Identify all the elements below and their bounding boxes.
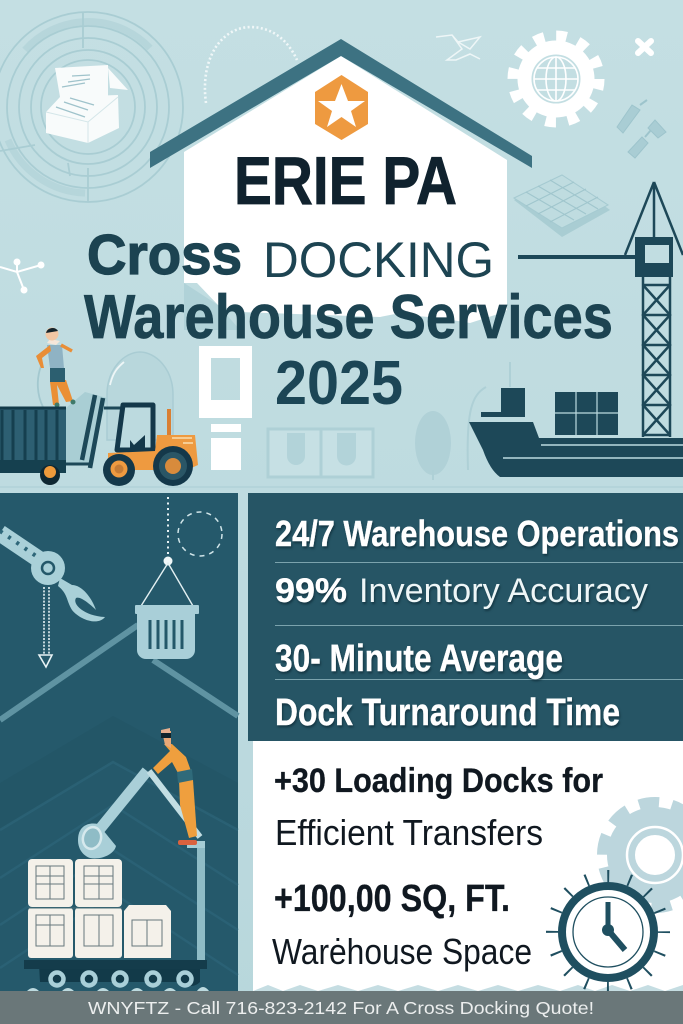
- panel: dark stats: [248, 493, 683, 741]
- heading: Warehouse Services: Warehouse Services: [84, 283, 613, 352]
- icon: stacked boxes: [28, 859, 171, 958]
- divider lines: [275, 562, 683, 680]
- stat: 30-minute average: 30- Minute Average: [275, 638, 563, 680]
- panel: left illustration: [0, 493, 238, 991]
- icon: dotted down arrow: [39, 587, 52, 667]
- icon: dashed circle: [178, 512, 222, 556]
- footer text: WNYFTZ - Call 716-823-2142 For A Cross Docking Quote!: [88, 998, 594, 1018]
- heading: Cross: Cross: [87, 223, 242, 287]
- icon: tower crane: [518, 182, 683, 437]
- fact: square feet: +100,00 SQ, FT.: [274, 878, 510, 920]
- faint dome behind forklift: [38, 352, 173, 463]
- icon: worker on container: [36, 328, 76, 408]
- icon: orange hexagon star badge: [315, 75, 368, 140]
- fact: efficient transfers: Efficient Transfers: [275, 812, 543, 853]
- scalloped bottom edge: [253, 985, 683, 991]
- icon: robot arm: [78, 771, 205, 961]
- icon: hanging basket: [135, 497, 199, 659]
- icon: small white molecule: [0, 260, 44, 292]
- fact: loading docks: +30 Loading Docks for: [274, 762, 603, 800]
- heading: 2025: 2025: [275, 349, 403, 418]
- stat: dock turnaround time: Dock Turnaround Time: [275, 692, 620, 734]
- white door shape: [199, 346, 252, 470]
- beams: [0, 625, 238, 720]
- panel: white facts: [253, 741, 683, 991]
- heading: ERIE PA: ERIE PA: [234, 143, 457, 219]
- icon: worker: [153, 728, 197, 845]
- fact: warehouse space: Warėhouse Space: [272, 931, 532, 972]
- stat: inventory accuracy: Inventory Accuracy: [359, 572, 648, 610]
- icon: wheeled cart: [24, 960, 207, 986]
- icon: small white x: [638, 41, 651, 53]
- icon: pale gear: [603, 803, 683, 907]
- icon: white gear with globe: [513, 36, 599, 122]
- icon: concentric rings with documents: [0, 12, 183, 202]
- stat: 99%: 99%: [275, 572, 347, 610]
- faint background scene: [0, 362, 683, 487]
- scalloped notches: [27, 987, 209, 991]
- icon: orange forklift: [66, 395, 198, 486]
- shade under house stair: [184, 283, 240, 330]
- icon: robotic claw: [0, 531, 105, 621]
- heading: DOCKING: DOCKING: [263, 232, 494, 288]
- chevron pattern: [0, 716, 238, 975]
- icon: cargo ship with containers: [469, 388, 683, 477]
- footer bar: [0, 991, 683, 1024]
- icon: birds: [436, 35, 480, 60]
- house with roof: [150, 39, 532, 323]
- icon: satellites: [617, 100, 666, 158]
- icon: dotted arc: [205, 27, 297, 103]
- icon: clock: [552, 876, 664, 988]
- icon: solar grid panel: [514, 175, 610, 237]
- icon: freight container: [0, 408, 66, 485]
